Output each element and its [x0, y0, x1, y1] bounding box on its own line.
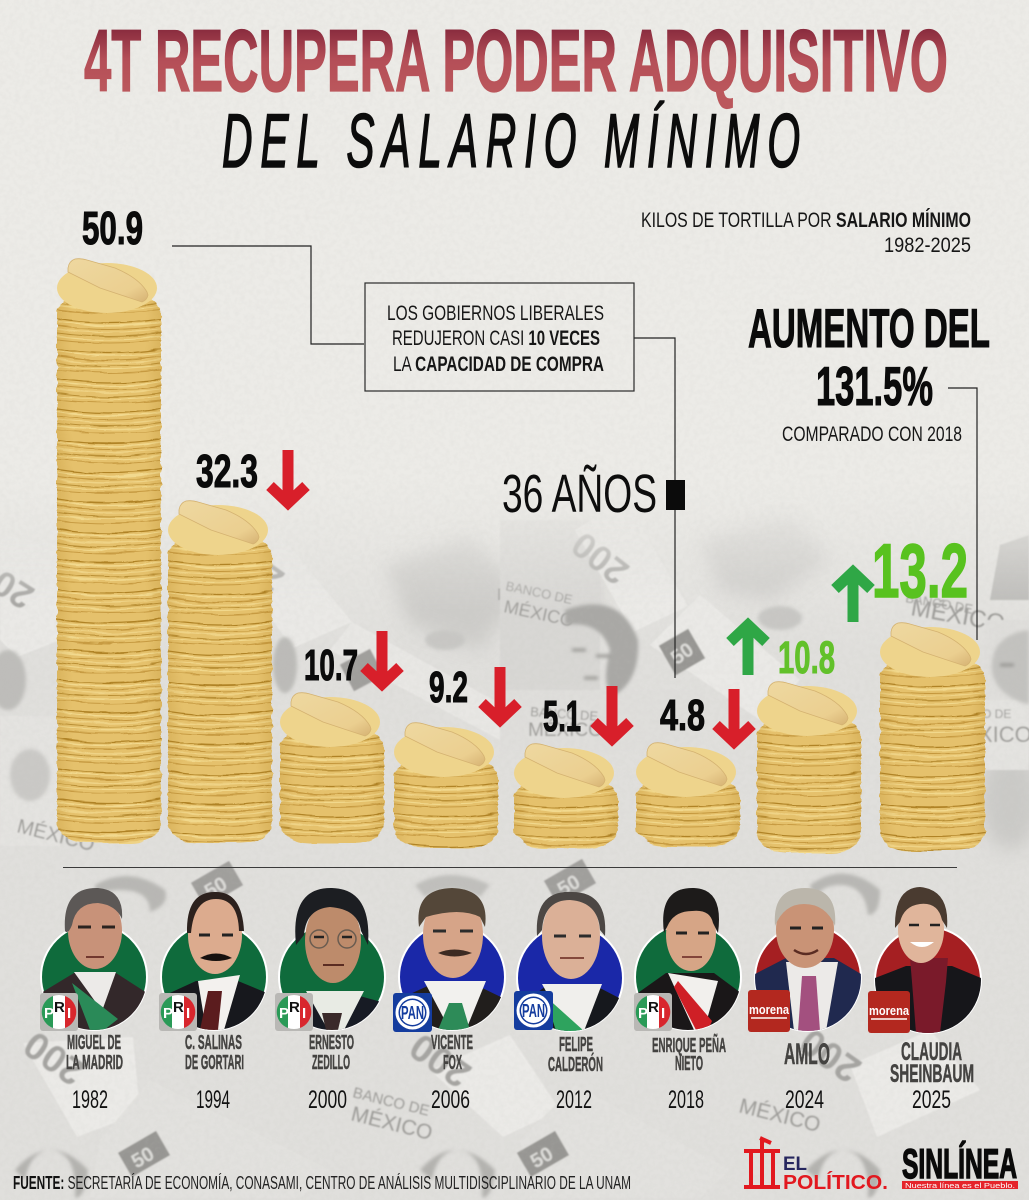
- party logo: Morena: [868, 991, 910, 1033]
- party logo: PRI: I: [67, 1005, 71, 1022]
- banknote collage background: 200: [17, 1022, 93, 1093]
- tortilla stack 2024: [757, 682, 861, 853]
- party logo: PRI: R: [289, 999, 300, 1016]
- term years: [72, 1086, 951, 1114]
- party logo: PRI: P: [44, 1005, 54, 1022]
- value labels: 9.2: [429, 663, 468, 712]
- banknote collage background: O DE: [982, 707, 1011, 721]
- banknote collage background: BANCO DE: [504, 578, 574, 607]
- tortilla stack 1994: [168, 501, 272, 843]
- party logo: PRI: I: [302, 1005, 306, 1022]
- value labels: 32.3: [196, 445, 258, 497]
- banknote collage background: MÉXICO: [349, 1103, 435, 1145]
- term years: 1994: [196, 1086, 230, 1114]
- banknote collage background: MÉXICO: [737, 1095, 823, 1137]
- source note: FUENTE: SECRETARÍA DE ECONOMÍA, CONASAMI, CENTRO DE ANÁLISIS MULTIDISCIPLINARIO DE LA UNAM: [13, 1173, 631, 1193]
- value labels: 4.8: [660, 691, 705, 740]
- president names: VICENTE: [431, 1032, 473, 1054]
- banknote collage background: 50: [554, 871, 584, 901]
- party logo: Morena: morena: [749, 1002, 790, 1017]
- portrait: AMLO: [755, 888, 861, 1031]
- president names: FELIPE: [559, 1034, 593, 1056]
- party logo: PAN: [393, 993, 432, 1032]
- president names: CLAUDIA: [901, 1038, 962, 1066]
- value labels: 10.7: [304, 641, 358, 690]
- portrait: Claudia Sheinbaum: [875, 887, 981, 1033]
- callout: aumento: 131.5%: [816, 355, 933, 417]
- banknote collage background: BANCO DE: [351, 1084, 431, 1120]
- party logo: PRI: [159, 993, 197, 1031]
- portrait: Felipe Calderón: [517, 892, 623, 1031]
- president names: ENRIQUE PEÑA: [652, 1034, 726, 1057]
- term years: 2025: [912, 1086, 951, 1114]
- callout: liberal governments: LA CAPACIDAD DE COMPRA: [393, 353, 604, 376]
- president names: ERNESTO: [309, 1032, 354, 1054]
- president names: FOX: [443, 1052, 462, 1074]
- tortilla stack 2006: [394, 723, 498, 848]
- term years: 2000: [308, 1086, 347, 1114]
- president names: ZEDILLO: [312, 1052, 350, 1074]
- callout: aumento: [748, 297, 990, 446]
- president names: DE GORTARI: [185, 1052, 244, 1074]
- portrait: Miguel de la Madrid: [41, 888, 147, 1030]
- president names: NIETO: [675, 1053, 703, 1075]
- portrait: Enrique Peña Nieto: [635, 888, 741, 1030]
- banknote collage background: 50: [128, 1143, 158, 1173]
- chart caption: KILOS DE TORTILLA POR SALARIO MÍNIMO: [641, 209, 971, 232]
- term years: 2012: [556, 1086, 592, 1114]
- callout: aumento: COMPARADO CON 2018: [782, 423, 962, 446]
- banknote collage background: 200: [793, 1019, 869, 1090]
- party logo: PRI: P: [163, 1005, 173, 1022]
- chart caption: 1982-2025: [884, 234, 971, 257]
- president names: C. SALINAS: [185, 1032, 242, 1054]
- value labels: 50.9: [82, 202, 143, 254]
- tortilla stack 2000: [280, 693, 384, 843]
- party logo: Morena: [748, 990, 790, 1032]
- president names: AMLO: [784, 1038, 830, 1071]
- portrait: Ernesto Zedillo: [279, 888, 385, 1030]
- title: [84, 11, 948, 184]
- party logo: PRI: P: [638, 1005, 648, 1022]
- banknote collage background: 200: [215, 530, 291, 601]
- logo: El Político: POLÍTICO.: [783, 1171, 888, 1194]
- party logo: PRI: R: [648, 999, 659, 1016]
- portrait: Carlos Salinas: [161, 892, 267, 1030]
- connector lines: [172, 246, 977, 678]
- value labels: 10.8: [778, 632, 835, 683]
- party logo: PRI: I: [186, 1005, 190, 1022]
- logo: Sin Línea: Nuestra línea es el Pueblo.: [905, 1181, 1015, 1190]
- tortilla stack 2012: [514, 744, 618, 848]
- party logo: PAN: PAN: [522, 1001, 545, 1021]
- party logo: PRI: [275, 993, 313, 1031]
- president names: MIGUEL DE: [67, 1032, 121, 1054]
- callout: liberal governments: [365, 283, 634, 391]
- president names: [66, 1032, 974, 1088]
- callout: liberal governments: LOS GOBIERNOS LIBERALES: [387, 302, 604, 325]
- banknote collage background: MÉ: [497, 585, 522, 604]
- banknote collage background: MÉXICO: [909, 594, 1007, 637]
- party logo: PRI: P: [279, 1005, 289, 1022]
- tortilla stack 2018: [636, 743, 740, 846]
- banknote collage background: 200: [403, 1024, 479, 1095]
- chart caption: [641, 209, 971, 257]
- party logo: PRI: R: [173, 999, 184, 1016]
- party logo: PAN: PAN: [401, 1003, 424, 1023]
- callout: liberal governments: REDUJERON CASI 10 VECES: [392, 327, 600, 350]
- portrait: Vicente Fox: [399, 888, 505, 1030]
- tortilla stack 2025: [880, 623, 985, 851]
- banknote collage background: [0, 500, 1029, 1198]
- banknote collage background: MÉXICO: [528, 720, 603, 741]
- banknote collage background: MÉXICO: [502, 596, 576, 631]
- value labels: 5.1: [543, 692, 581, 741]
- party logo: PRI: [634, 993, 672, 1031]
- term years: 2024: [785, 1086, 824, 1114]
- red down arrows: [270, 450, 752, 743]
- banknote collage background: BANCO DE: [904, 590, 974, 617]
- term years: 2006: [431, 1086, 470, 1114]
- party logo: PRI: I: [661, 1005, 665, 1022]
- value labels: [82, 202, 968, 741]
- banknote collage background: 50: [201, 873, 231, 903]
- banknote collage background: 50: [667, 639, 698, 670]
- term years: 2018: [668, 1086, 704, 1114]
- banknote collage background: MÉXICO: [15, 815, 97, 856]
- president names: CALDERÓN: [548, 1052, 603, 1076]
- party logo: Morena: morena: [869, 1003, 910, 1018]
- party logo: PRI: R: [54, 999, 65, 1016]
- banknote collage background: 200: [563, 524, 636, 593]
- green up arrows: [730, 571, 871, 675]
- banknote collage background: BANCO DE: [530, 704, 599, 724]
- banknote collage background: 50: [527, 1143, 557, 1173]
- value labels: 13.2: [872, 529, 968, 614]
- callout: 36 años: 36 AÑOS: [502, 464, 657, 524]
- party logo: PAN: [514, 991, 553, 1030]
- party logo: PRI: [40, 993, 78, 1031]
- term years: 1982: [72, 1086, 108, 1114]
- divider: [63, 867, 957, 868]
- tortilla stack 1982: [57, 259, 161, 843]
- president names: LA MADRID: [66, 1052, 123, 1074]
- logo: El Político: [744, 1138, 888, 1194]
- logo: El Político: EL: [783, 1154, 807, 1175]
